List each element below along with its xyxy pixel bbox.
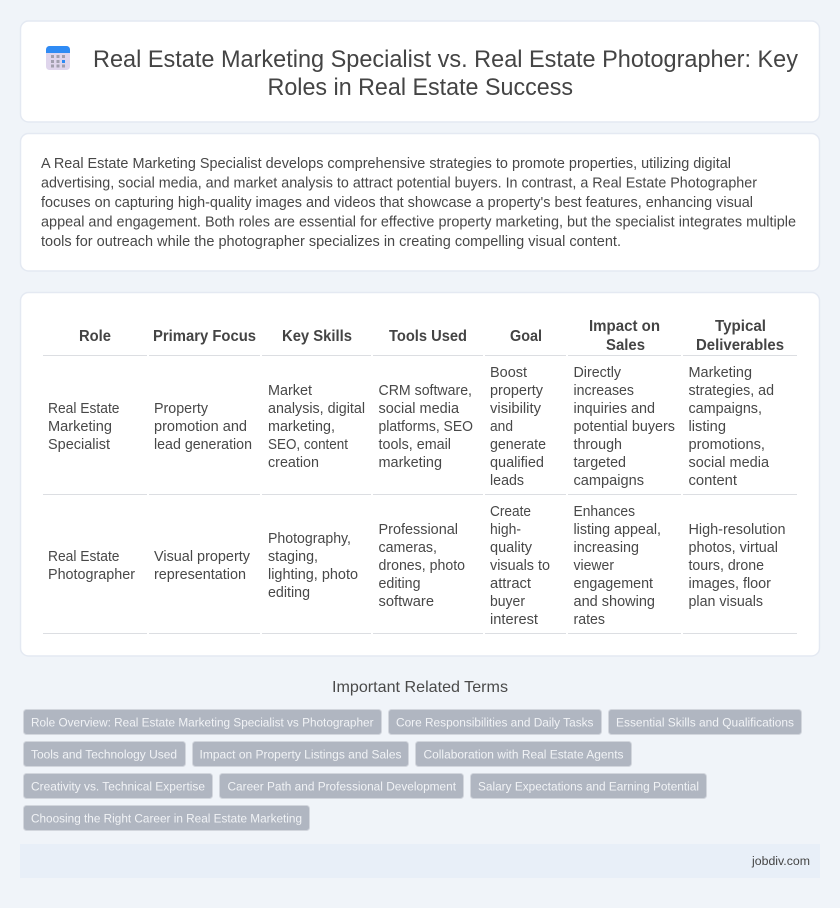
table row: marketing specialist: creation — [268, 455, 319, 471]
table header row: Deliverables — [696, 337, 784, 354]
table row: marketing specialist: qualified — [490, 455, 544, 471]
intro text: advertising, social media, and market analysis to attract potential buyers. In contrast, a Real Estate Photographer — [41, 176, 757, 192]
tag — [608, 710, 802, 734]
related terms tags — [24, 710, 802, 830]
table row: marketing specialist: campaigns — [574, 473, 644, 489]
icon: calendar — [46, 46, 70, 70]
intro text: appeal and engagement. Both roles are essential for effective property marketing, but the specialist integrates multiple — [41, 214, 796, 230]
table row: photographer: Visual property — [154, 549, 251, 565]
intro text: focuses on capturing high-quality images and videos that showcase a property's best features, enhancing visual — [41, 195, 753, 211]
table row: marketing specialist — [48, 365, 774, 489]
table header row: Primary Focus — [153, 328, 256, 345]
intro text: A Real Estate Marketing Specialist develops comprehensive strategies to promote properties, utilizing digital — [41, 156, 731, 172]
table row: photographer: cameras, — [378, 540, 437, 556]
tag: Impact on Property Listings and Sales — [200, 748, 402, 762]
table row: marketing specialist: Marketing — [688, 365, 752, 381]
table row: photographer: images, floor — [688, 576, 771, 592]
table row: photographer: engagement — [574, 576, 653, 592]
tag — [192, 742, 408, 766]
table row: photographer: Photographer — [48, 567, 135, 583]
table row: photographer: visuals to — [490, 558, 550, 574]
table row: photographer: High-resolution — [688, 522, 786, 538]
table row: marketing specialist: lead generation — [154, 437, 252, 453]
tag: Role Overview: Real Estate Marketing Specialist vs Photographer — [31, 716, 374, 730]
table row: photographer: viewer — [574, 558, 614, 574]
table row: marketing specialist: leads — [490, 473, 524, 489]
table row: marketing specialist: through — [574, 437, 622, 453]
tag — [388, 710, 602, 734]
tag — [220, 774, 464, 798]
table row: photographer: listing appeal, — [574, 522, 661, 538]
table row: marketing specialist: inquiries and — [574, 401, 655, 417]
footer bar — [20, 844, 820, 878]
table row: photographer: attract — [490, 576, 531, 592]
table row: photographer: Enhances — [574, 504, 635, 520]
table row: photographer: quality — [490, 540, 533, 556]
table header row — [79, 318, 784, 354]
table row: photographer: Real Estate — [48, 549, 120, 565]
tag — [24, 710, 382, 734]
table row: photographer: Photography, — [268, 531, 351, 547]
table row: marketing specialist: CRM software, — [378, 383, 472, 399]
tag — [24, 742, 186, 766]
table row: photographer: plan visuals — [688, 594, 763, 610]
table row: photographer: software — [378, 594, 434, 610]
table row: marketing specialist: analysis, digital — [268, 401, 365, 417]
table row: marketing specialist: Real Estate — [48, 401, 120, 417]
table row: marketing specialist: potential buyers — [574, 419, 675, 435]
tag: Creativity vs. Technical Expertise — [31, 780, 205, 794]
table header row: Tools Used — [389, 328, 467, 345]
table header row: Typical — [715, 318, 766, 335]
table row: marketing specialist: and — [490, 419, 513, 435]
tag: Career Path and Professional Development — [228, 780, 457, 794]
table row: photographer — [48, 504, 786, 628]
footer source: jobdiv.com — [751, 854, 810, 868]
table row: marketing specialist: generate — [490, 437, 546, 453]
table row: photographer: Create — [490, 504, 531, 520]
table row: photographer: high- — [490, 522, 521, 538]
table row: marketing specialist: Directly — [574, 365, 622, 381]
table row: photographer: interest — [490, 612, 538, 628]
table row: photographer: staging, — [268, 549, 318, 565]
table row: marketing specialist: promotions, — [688, 437, 765, 453]
tag — [24, 774, 212, 798]
table row: photographer: photos, virtual — [688, 540, 778, 556]
table row: photographer: tours, drone — [688, 558, 764, 574]
tag — [470, 774, 706, 798]
table row: photographer: editing — [378, 576, 421, 592]
table row: marketing specialist: marketing, — [268, 419, 335, 435]
table row: marketing specialist: SEO, content — [268, 437, 348, 453]
table row: photographer: drones, photo — [378, 558, 465, 574]
table row: marketing specialist: increases — [574, 383, 634, 399]
table row: marketing specialist: Property — [154, 401, 209, 417]
table header row: Goal — [510, 328, 542, 345]
table row: marketing specialist: strategies, ad — [688, 383, 774, 399]
tag: Essential Skills and Qualifications — [616, 716, 794, 730]
intro text: tools for outreach while the photographer specializes in creating compelling visual content. — [41, 234, 621, 250]
table row: marketing specialist: social media — [688, 455, 769, 471]
tag: Core Responsibilities and Daily Tasks — [396, 716, 594, 730]
table row: marketing specialist: platforms, SEO — [378, 419, 473, 435]
table row: marketing specialist: targeted — [574, 455, 626, 471]
table row: photographer: Professional — [378, 522, 458, 538]
title: Roles in Real Estate Success — [268, 74, 573, 101]
table row: marketing specialist: property — [490, 383, 544, 399]
table row: marketing specialist: Marketing — [48, 419, 112, 435]
tag: Collaboration with Real Estate Agents — [424, 748, 624, 762]
table row: marketing specialist: promotion and — [154, 419, 247, 435]
tag: Salary Expectations and Earning Potential — [478, 780, 699, 794]
panel: comparison table — [20, 292, 820, 656]
table row: photographer: rates — [574, 612, 605, 628]
tag — [416, 742, 632, 766]
table row: photographer: representation — [154, 567, 246, 583]
table row: marketing specialist: marketing — [378, 455, 442, 471]
table row: marketing specialist: Boost — [490, 365, 527, 381]
tag — [24, 806, 310, 830]
section heading: related terms: Important Related Terms — [332, 679, 508, 696]
panel: introduction — [20, 134, 820, 271]
table row: marketing specialist: Market — [268, 383, 312, 399]
table row: photographer: increasing — [574, 540, 639, 556]
table row: marketing specialist: content — [688, 473, 737, 489]
table row: photographer: buyer — [490, 594, 525, 610]
table row: marketing specialist: Specialist — [48, 437, 110, 453]
table header row: Key Skills — [282, 328, 352, 345]
table header row: Sales — [606, 337, 645, 354]
tag: Tools and Technology Used — [31, 748, 177, 762]
title: Real Estate Marketing Specialist vs. Real Estate Photographer: Key — [93, 46, 798, 73]
table row: photographer: lighting, photo — [268, 567, 358, 583]
table row: marketing specialist: listing — [688, 419, 726, 435]
intro text — [41, 156, 796, 250]
title — [93, 46, 798, 101]
tag: Choosing the Right Career in Real Estate Marketing — [31, 812, 302, 826]
table row: photographer: editing — [268, 585, 310, 601]
table row: marketing specialist: campaigns, — [688, 401, 762, 417]
header panel — [20, 21, 820, 122]
table row: photographer: and showing — [574, 594, 655, 610]
table header row: Impact on — [589, 318, 660, 335]
table row: marketing specialist: visibility — [490, 401, 542, 417]
table header row: Role — [79, 328, 111, 345]
table row: marketing specialist: tools, email — [378, 437, 451, 453]
table row: marketing specialist: social media — [378, 401, 459, 417]
